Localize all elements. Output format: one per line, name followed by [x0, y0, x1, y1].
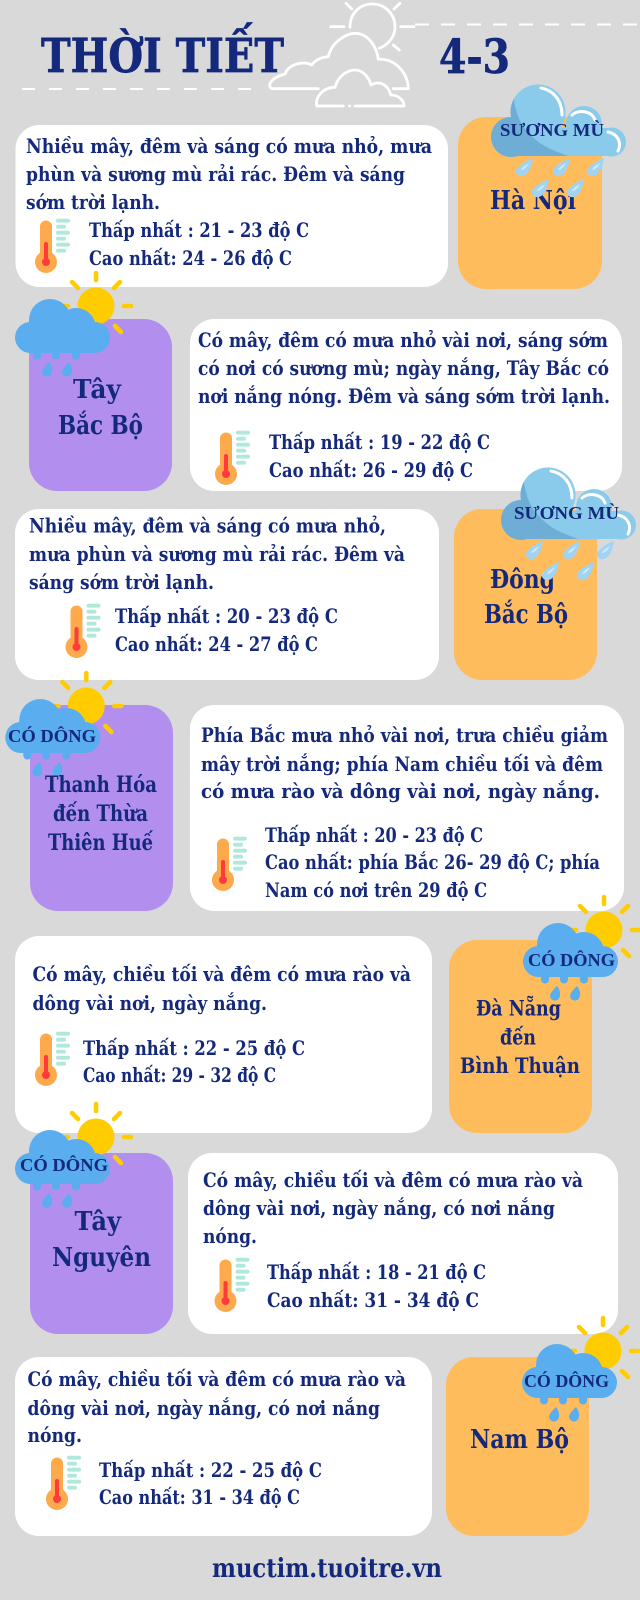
region tile: [446, 1357, 589, 1536]
temperatures: Cao nhất: 29 - 32 độ C: [83, 1063, 276, 1087]
region tile: [30, 705, 173, 911]
temperatures: Thấp nhất : 22 - 25 độ C: [99, 1458, 322, 1482]
icon: thermometer: [215, 431, 250, 485]
temperatures: Cao nhất: 24 - 26 độ C: [89, 246, 292, 270]
temperatures: Thấp nhất : 19 - 22 độ C: [269, 430, 490, 454]
forecast text: [29, 514, 405, 594]
temperatures: Thấp nhất : 21 - 23 độ C: [89, 218, 309, 242]
region tile: [458, 117, 602, 289]
region name: Thanh Hóa: [45, 772, 157, 798]
region name: Bắc Bộ: [484, 599, 568, 630]
forecast text: có mưa rào và dông vài nơi, ngày nắng.: [201, 779, 600, 803]
region name: đến: [500, 1024, 536, 1050]
icon: thermometer: [214, 1258, 250, 1312]
temperatures: [115, 604, 338, 656]
region name: Nguyên: [52, 1243, 151, 1273]
panel: Đông Bắc Bộ: [15, 467, 636, 680]
region name: Hà Nội: [490, 186, 576, 216]
region tile: [449, 940, 592, 1133]
panel: Tây Bắc Bộ: [15, 273, 622, 491]
region name: [52, 1207, 151, 1273]
forecast text: sớm trời lạnh.: [26, 190, 160, 214]
panel: Nam Bộ: [15, 1318, 638, 1536]
region tile: [29, 319, 172, 491]
panel: Thanh Hóa đến Thừa Thiên Huế: [5, 673, 624, 911]
icon: sun and rain cloud: [5, 673, 121, 777]
region name: Thiên Huế: [48, 830, 154, 856]
forecast text: dông vài nơi, ngày nắng, có nơi nắng: [203, 1196, 555, 1220]
icon: thermometer: [46, 1456, 81, 1510]
forecast card: [15, 936, 432, 1133]
temperatures: [265, 823, 600, 902]
forecast text: nóng.: [28, 1423, 82, 1447]
forecast text: sáng sớm trời lạnh.: [29, 570, 214, 594]
title: THỜI TIẾT: [41, 22, 284, 84]
date: 4-3: [439, 30, 510, 85]
weather label: SƯƠNG MÙ: [514, 502, 619, 523]
region name: đến Thừa: [53, 801, 148, 827]
forecast card: [190, 705, 624, 911]
temperatures: Thấp nhất : 20 - 23 độ C: [265, 823, 483, 847]
region name: [58, 375, 143, 441]
region name: [460, 996, 580, 1078]
icon: sun and rain cloud: [522, 1318, 638, 1422]
icon: fog cloud: [495, 467, 636, 580]
weather label: CÓ DÔNG: [8, 725, 96, 746]
forecast text: dông vài nơi, ngày nắng.: [32, 991, 267, 1015]
weather label: SƯƠNG MÙ: [500, 119, 604, 140]
panel: Hà Nội: [16, 84, 626, 289]
icon: sun and rain cloud: [15, 273, 131, 377]
weather label: CÓ DÔNG: [528, 949, 615, 970]
region name: Đà Nẵng: [476, 996, 561, 1020]
forecast text: Nhiều mây, đêm và sáng có mưa nhỏ, mưa: [26, 134, 432, 158]
panel: Đà Nẵng đến Bình Thuận: [15, 897, 639, 1133]
region name: [484, 565, 568, 630]
region name: Bình Thuận: [460, 1053, 580, 1078]
forecast text: [32, 962, 411, 1015]
icon: fog cloud: [485, 84, 626, 197]
forecast text: Nhiều mây, đêm và sáng có mưa nhỏ,: [29, 514, 386, 538]
region name: Nam Bộ: [470, 1425, 569, 1455]
region name: Bắc Bộ: [58, 410, 143, 441]
temperatures: Thấp nhất : 18 - 21 độ C: [267, 1260, 486, 1284]
region name: Tây: [74, 1207, 122, 1237]
forecast text: Có mây, chiều tối và đêm có mưa rào và: [28, 1367, 406, 1391]
region name: Đông: [490, 565, 555, 595]
forecast text: Có mây, chiều tối và đêm có mưa rào và: [32, 962, 411, 986]
icon: sun and rain cloud: [15, 1104, 131, 1208]
forecast card: [190, 319, 622, 491]
temperatures: Cao nhất: 24 - 27 độ C: [115, 632, 318, 656]
icon: outlined sun and clouds: [270, 3, 414, 106]
temperatures: [269, 430, 490, 482]
forecast text: Có mây, chiều tối và đêm có mưa rào và: [203, 1168, 583, 1192]
temperatures: Nam có nơi trên 29 độ C: [265, 878, 487, 902]
forecast text: [201, 723, 608, 803]
icon: thermometer: [35, 219, 70, 273]
icon: thermometer: [35, 1032, 70, 1086]
forecast text: nóng.: [203, 1224, 257, 1248]
panel: Tây Nguyên: [15, 1104, 618, 1334]
region tile: [30, 1153, 173, 1334]
forecast card: [15, 1357, 432, 1536]
footer source: muctim.tuoitre.vn: [212, 1554, 442, 1584]
temperatures: [267, 1260, 486, 1312]
forecast text: phùn và sương mù rải rác. Đêm và sáng: [26, 162, 405, 186]
forecast card: [16, 125, 448, 287]
icon: sun and rain cloud: [523, 897, 639, 1001]
temperatures: [99, 1458, 322, 1509]
region name: Tây: [73, 375, 122, 405]
forecast text: mưa phùn và sương mù rải rác. Đêm và: [29, 542, 405, 566]
forecast text: [28, 1367, 406, 1447]
temperatures: Thấp nhất : 20 - 23 độ C: [115, 604, 338, 628]
forecast text: [26, 134, 432, 214]
weather label: CÓ DÔNG: [524, 1370, 609, 1391]
header: [22, 3, 640, 106]
forecast text: [203, 1168, 583, 1248]
temperatures: Cao nhất: 26 - 29 độ C: [269, 458, 473, 482]
temperatures: [83, 1036, 305, 1087]
weather label: CÓ DÔNG: [20, 1154, 108, 1175]
forecast text: [198, 328, 610, 408]
temperatures: Cao nhất: 31 - 34 độ C: [267, 1288, 479, 1312]
temperatures: Cao nhất: 31 - 34 độ C: [99, 1485, 300, 1509]
forecast text: dông vài nơi, ngày nắng, có nơi nắng: [28, 1396, 380, 1420]
icon: thermometer: [66, 604, 100, 658]
forecast card: [15, 509, 439, 680]
region name: [45, 772, 157, 856]
icon: thermometer: [212, 837, 247, 891]
temperatures: Thấp nhất : 22 - 25 độ C: [83, 1036, 305, 1060]
forecast card: [188, 1153, 618, 1334]
temperatures: [89, 218, 309, 270]
region tile: [454, 509, 597, 680]
